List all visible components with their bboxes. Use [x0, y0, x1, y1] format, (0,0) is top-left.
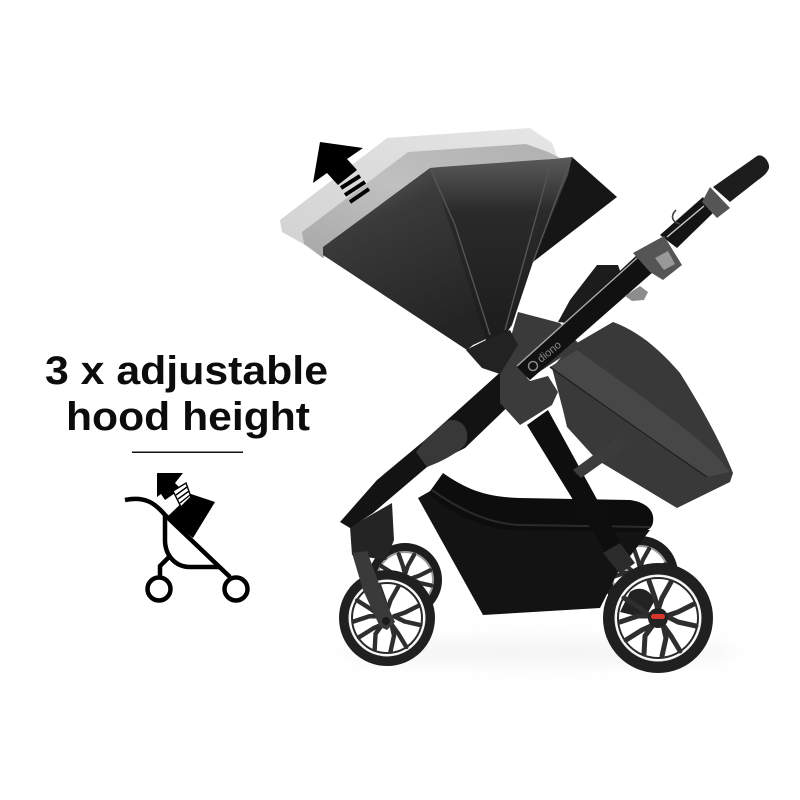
icon arrow stripes [173, 483, 191, 507]
ghost hood positions [280, 128, 560, 258]
handle collar [702, 187, 730, 218]
frame joint [416, 420, 467, 467]
canopy seams [430, 157, 572, 335]
arrow stripes [341, 176, 369, 202]
icon canopy [165, 493, 215, 538]
front swivel arm [352, 551, 395, 630]
handle highlight [517, 258, 637, 366]
heading line 2: hood height [66, 395, 310, 439]
canopy tail [533, 157, 617, 262]
stroller [323, 155, 769, 673]
icon arrow [157, 473, 183, 500]
handle tube [517, 255, 653, 380]
heading line 1: 3 x adjustable [45, 349, 328, 393]
floor shadow [340, 639, 740, 665]
front fork [350, 503, 394, 560]
rear leg collar [603, 543, 635, 574]
brand label: diono [535, 339, 564, 365]
rear leg [527, 410, 622, 555]
rear wheel [603, 563, 713, 673]
ghost hood: middle [302, 144, 560, 258]
footmuff band [550, 350, 730, 477]
folding joint [633, 236, 682, 280]
divider [132, 452, 243, 453]
handle highlight upper [667, 206, 704, 237]
heading [45, 349, 328, 439]
arrow head [313, 142, 363, 185]
brand logo mark [528, 362, 538, 370]
backrest strap [558, 265, 625, 325]
footmuff seam [550, 367, 707, 477]
icon white backing [157, 488, 188, 517]
small hook [673, 210, 680, 224]
handle grip [713, 155, 769, 202]
icon frame [125, 499, 248, 600]
seat base [500, 312, 580, 378]
rear-side back wheel [602, 536, 678, 612]
frame hub [500, 367, 558, 425]
latch [625, 286, 648, 301]
canopy left panel [323, 168, 495, 350]
ghost hood: highest [280, 128, 558, 255]
icon: stroller with raised hood [125, 473, 248, 600]
hood hinge [466, 330, 518, 374]
footmuff [552, 322, 733, 508]
front-side back wheel [368, 543, 442, 617]
front wheel [339, 570, 435, 666]
upper handle tube [660, 197, 713, 248]
footrest bracket [573, 437, 626, 478]
basket [418, 473, 653, 615]
red brake [639, 585, 668, 605]
lower frame [340, 368, 520, 528]
canopy centre panel [430, 157, 572, 340]
joint release button [655, 251, 675, 270]
hood up arrow [313, 142, 369, 202]
